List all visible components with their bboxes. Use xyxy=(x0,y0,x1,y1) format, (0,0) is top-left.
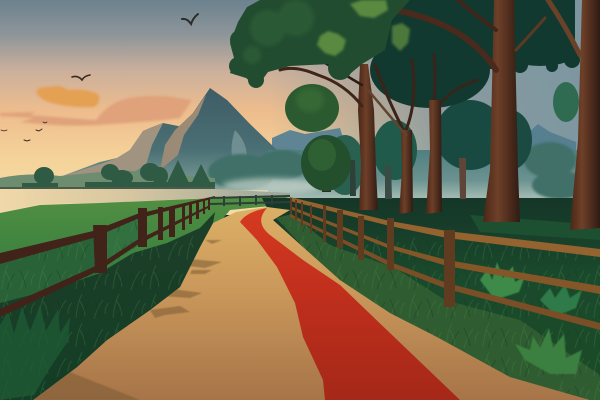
left wooden fence xyxy=(0,196,215,317)
dark forest canopy xyxy=(360,0,580,108)
right meadow xyxy=(262,198,600,400)
left tree line on far shore xyxy=(0,160,215,189)
path shading xyxy=(33,240,222,400)
reeds behind left fence xyxy=(0,215,138,303)
left meadow xyxy=(0,196,290,400)
tree branches xyxy=(280,0,580,135)
left roadside dark grass xyxy=(0,212,215,400)
lake xyxy=(0,189,290,213)
distant mountains xyxy=(57,88,576,190)
sky xyxy=(0,0,600,215)
red stripe on path xyxy=(240,208,460,400)
left tree canopy xyxy=(229,0,410,88)
large tree trunks xyxy=(358,0,600,230)
right wooden fence xyxy=(290,197,600,330)
second-layer canopy xyxy=(285,84,339,132)
right meadow texture xyxy=(276,214,600,400)
dirt path xyxy=(33,207,590,400)
birds xyxy=(1,14,198,141)
mist over the valley xyxy=(222,178,322,194)
far right trees xyxy=(325,82,579,199)
small round tree xyxy=(301,135,351,192)
far fence xyxy=(210,195,290,206)
far misty tree band xyxy=(208,142,588,200)
mid branches xyxy=(375,55,478,135)
sunset clouds xyxy=(0,86,192,126)
